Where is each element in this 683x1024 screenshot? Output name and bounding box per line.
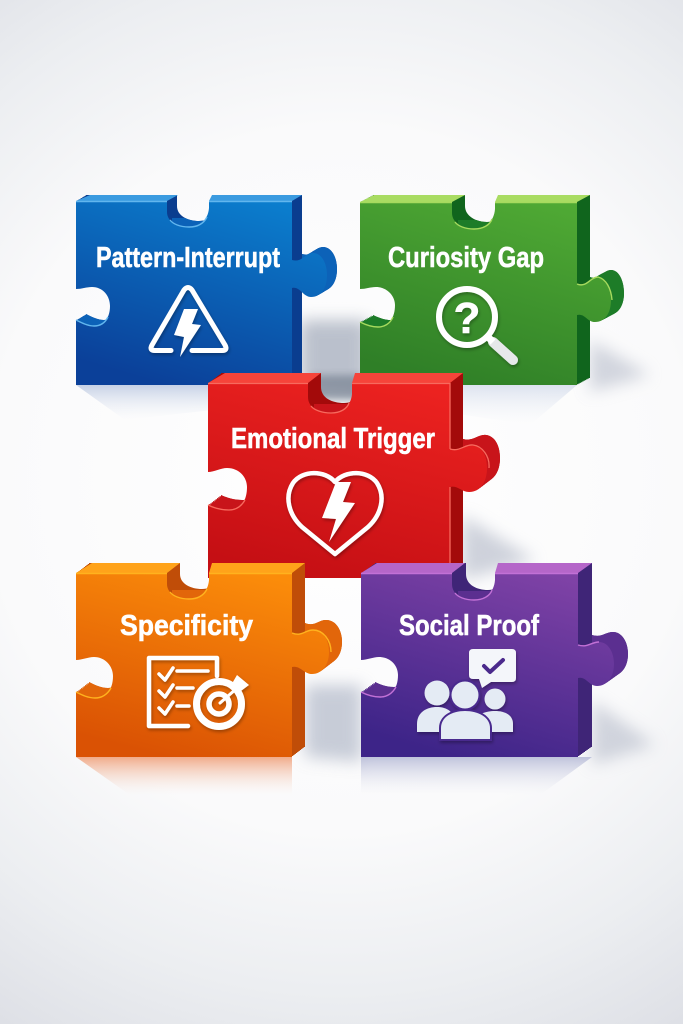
- icon: checklist and target: [149, 658, 249, 726]
- tab and notch lips: purple: [362, 591, 628, 696]
- piece face: green: [360, 202, 611, 385]
- piece depth: blue: [77, 195, 337, 384]
- heading: Specificity: Specificity: [120, 610, 253, 642]
- piece face: purple: [361, 573, 614, 757]
- top ledge: blue: [76, 195, 302, 201]
- piece face: orange: [76, 573, 329, 757]
- piece face: red: [208, 383, 487, 578]
- edge highlights: blue: [76, 202, 292, 326]
- tab and notch lips: green: [361, 220, 624, 326]
- top ledge: purple: [361, 563, 592, 573]
- icon: group of people with speech bubble: [417, 649, 516, 741]
- top ledge: red: [208, 373, 463, 383]
- puzzle piece: Curiosity Gap: [360, 195, 624, 385]
- heading: Social Proof: Social Proof: [399, 610, 539, 642]
- puzzle piece: Emotional Trigger: [208, 373, 500, 578]
- edge highlights: orange: [76, 574, 331, 698]
- edge highlights: red: [208, 384, 489, 578]
- icon: warning triangle with bolt: [151, 288, 226, 357]
- heading: Emotional Trigger: Emotional Trigger: [231, 423, 435, 455]
- puzzle piece: Social Proof: [361, 563, 628, 757]
- edge highlights: green: [360, 202, 612, 327]
- piece face: blue: [76, 201, 327, 385]
- cast shadows: [76, 320, 655, 795]
- edge highlights: purple: [361, 574, 599, 697]
- tab and notch lips: orange: [77, 590, 342, 698]
- piece depth: purple: [362, 563, 628, 756]
- piece depth: orange: [77, 563, 342, 756]
- tab and notch lips: blue: [77, 218, 337, 326]
- icon: heart with bolt: [288, 473, 382, 554]
- top ledge: green: [360, 195, 590, 202]
- heading: Pattern-Interrupt: Pattern-Interrupt: [96, 242, 280, 274]
- top ledge: orange: [76, 563, 305, 573]
- piece depth: red: [209, 373, 500, 577]
- icon: magnifier with question mark: [439, 289, 513, 360]
- puzzle piece: Pattern-Interrupt: [76, 195, 337, 385]
- heading: Curiosity Gap: Curiosity Gap: [388, 242, 544, 274]
- icon: magnifier with question mark: ?: [454, 294, 480, 343]
- puzzle piece: Specificity: [76, 563, 342, 757]
- piece depth: green: [361, 195, 624, 384]
- tab and notch lips: red: [209, 404, 500, 510]
